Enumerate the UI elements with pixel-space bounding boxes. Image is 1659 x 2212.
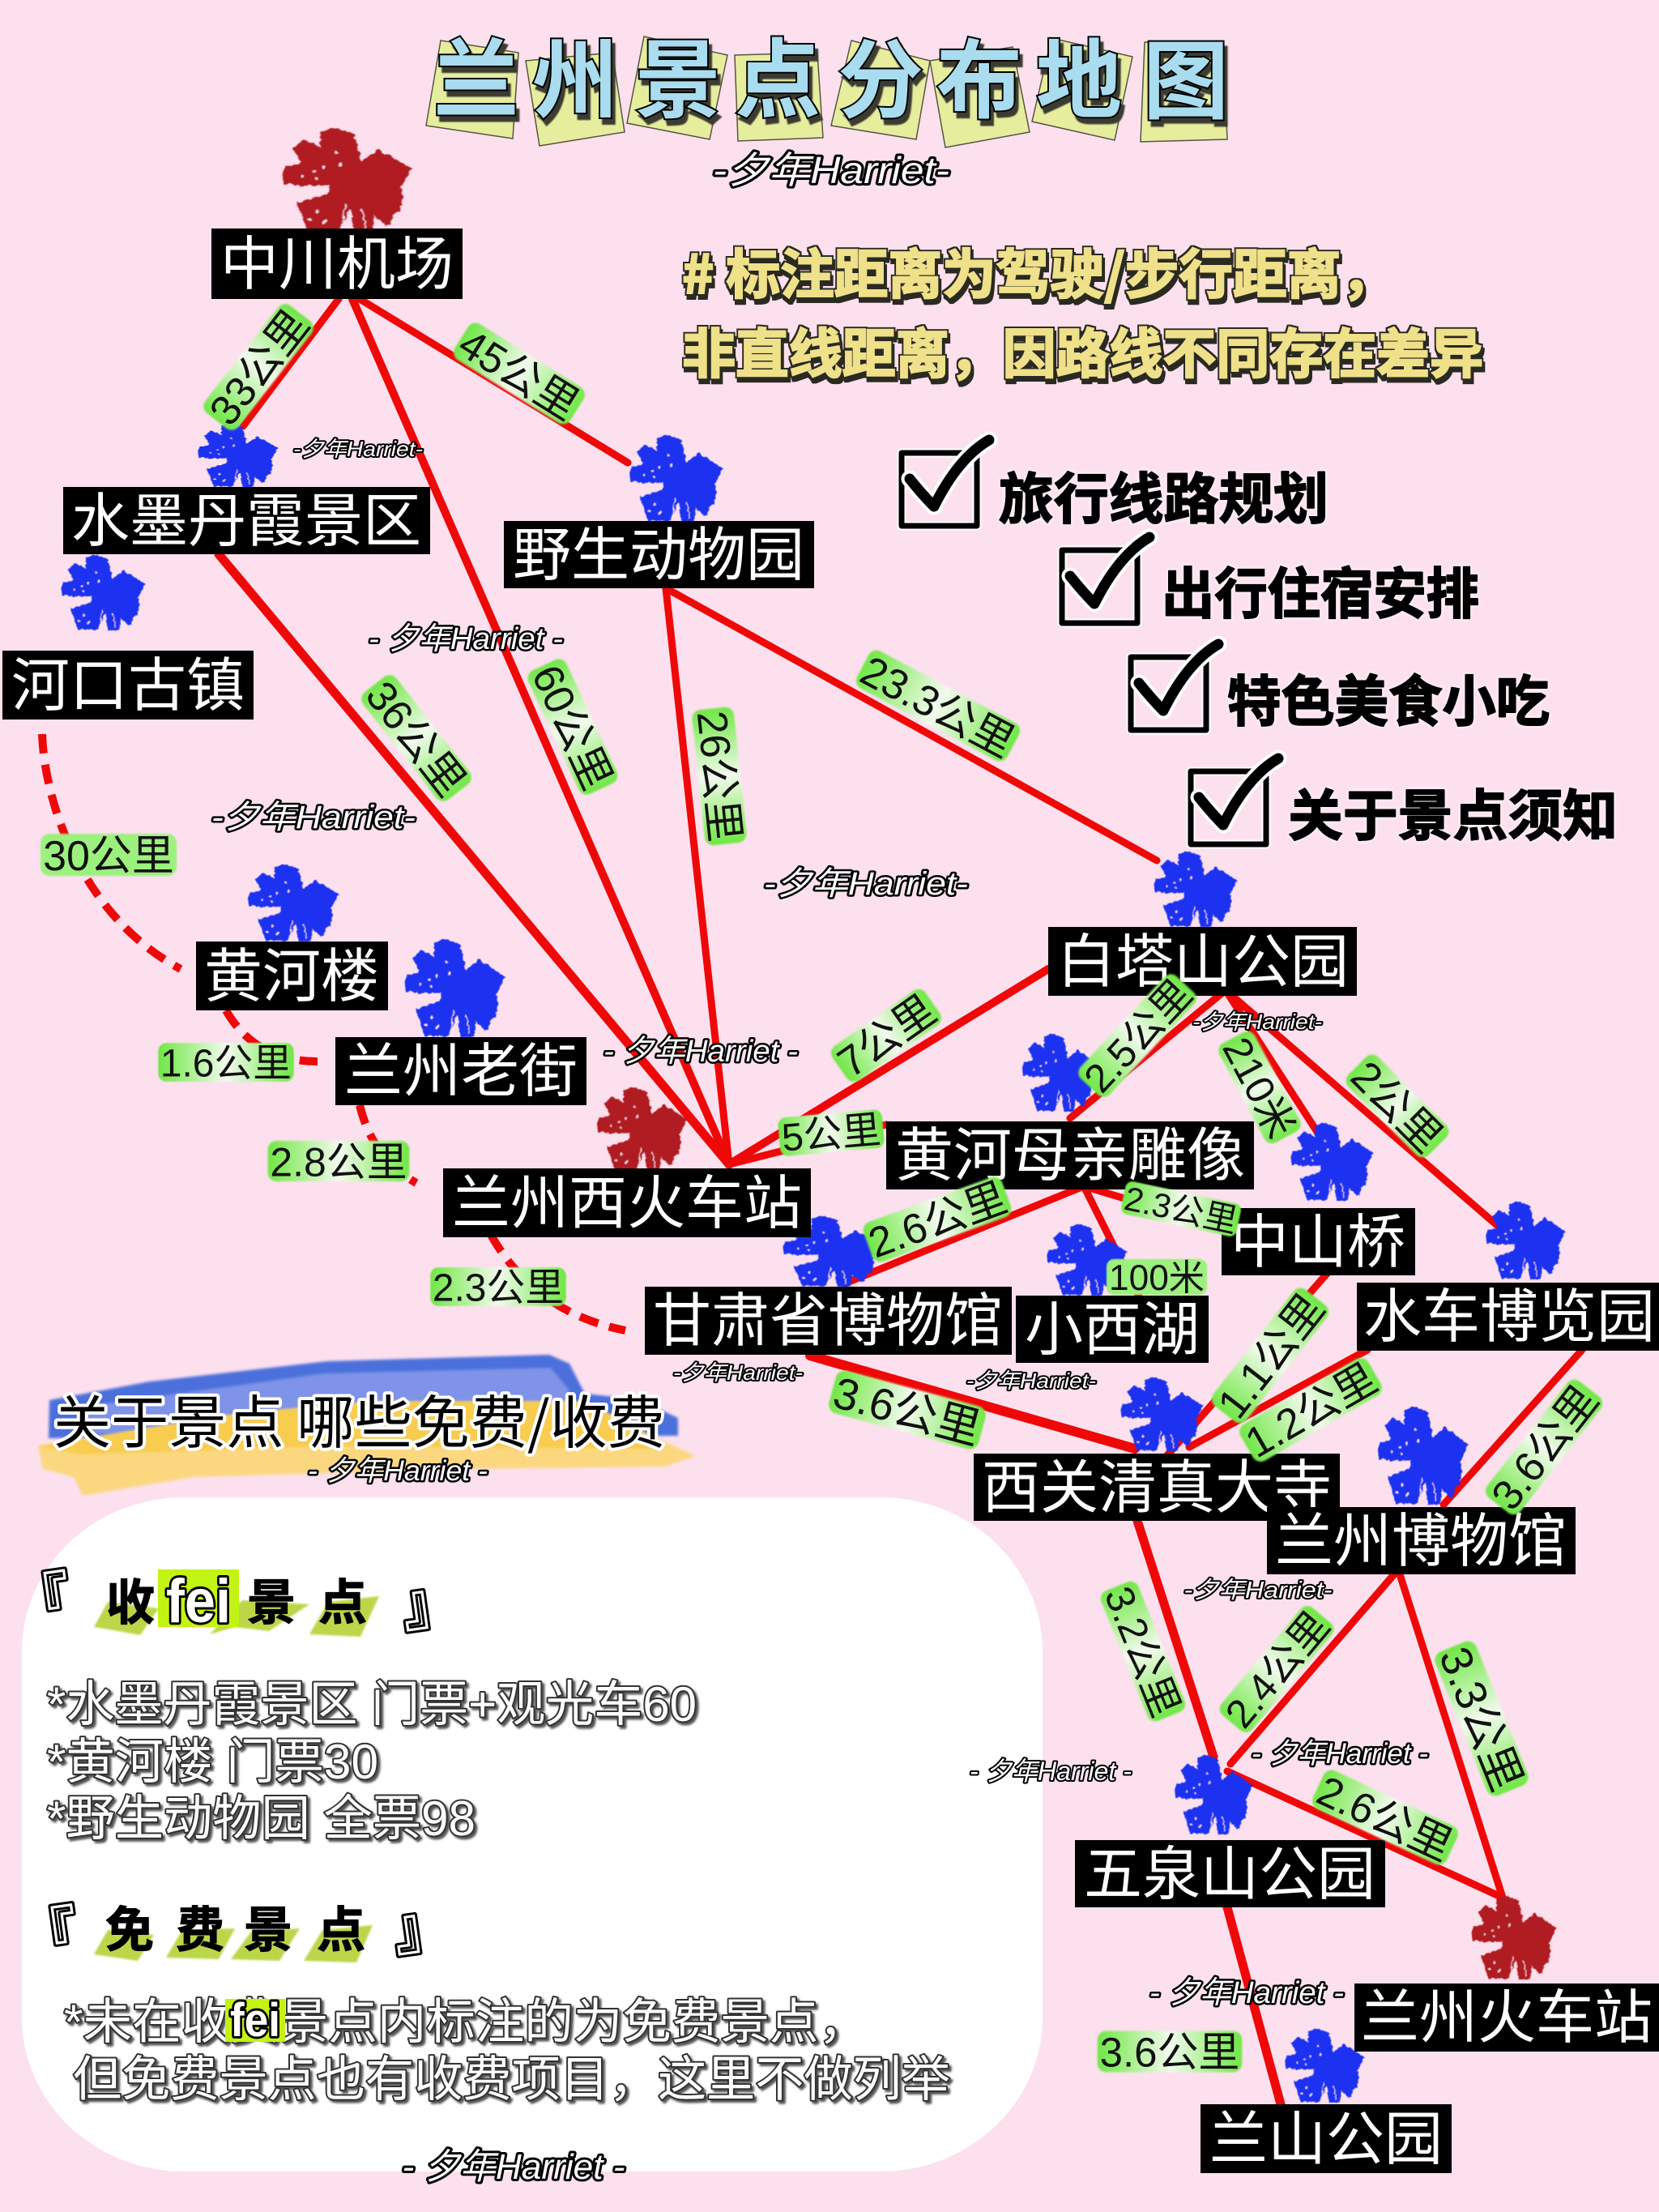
icon: blue flower 西关清真大寺 [1121, 1377, 1203, 1451]
heading: 免费景点: 『 [13, 1885, 83, 1977]
panel: white fee panel [22, 1497, 1043, 2171]
icon: red flower 兰州火车站 [1473, 1895, 1556, 1979]
route lines network [219, 299, 1582, 2104]
icon: blue flower 黄河母亲 [1023, 1033, 1097, 1112]
watermark: -夕年Harriet- [1184, 1578, 1332, 1603]
distance: 2.4公里: 2.4公里 [1217, 1603, 1338, 1736]
distance: 2.3公里 west: 2.3公里 [433, 1266, 564, 1309]
label: 西关清真大寺: 西关清真大寺 [982, 1440, 1332, 1525]
note: distance disclaimer: 非直线距离，因路线不同存在差异 [682, 311, 1483, 389]
label: 水墨丹霞景区: 水墨丹霞景区 [71, 473, 421, 558]
icon: blue flower 水墨丹霞 [198, 423, 278, 487]
text block: 免费说明 [64, 1994, 950, 2107]
title: 兰州景点分布地图: 州 [532, 11, 618, 136]
label: 黄河楼: 黄河楼 [204, 929, 379, 1014]
distance: 2.6公里: 2.6公里 [863, 1174, 1013, 1267]
icon: blue flower 白塔山 [1154, 851, 1237, 927]
icon: blue flower 水车博览园 [1486, 1201, 1565, 1279]
list: 收费项目: *水墨丹霞景区 门票+观光车60 [47, 1677, 697, 1732]
label: 小西湖: 小西湖 [1025, 1282, 1200, 1367]
heading: 免费景点: 』 [386, 1875, 456, 1967]
checklist item 3: 特色美食小吃 [1227, 657, 1550, 737]
distance: 36公里: 36公里 [356, 673, 474, 805]
distance: 2公里: 2公里 [1341, 1053, 1451, 1162]
heading: 收费景点: 点 [318, 1564, 367, 1634]
watermark: -夕年Harriet- [713, 149, 949, 191]
note: distance disclaimer [682, 232, 1483, 389]
label: 五泉山公园: 五泉山公园 [1084, 1826, 1375, 1911]
distance: 26公里: 26公里 [688, 709, 748, 844]
watermark: -夕年Harriet- [966, 1369, 1096, 1393]
label: 河口古镇: 河口古镇 [11, 638, 245, 723]
watermark: - 夕年Harriet - [369, 622, 563, 656]
title: 兰州景点分布地图: 点 [735, 11, 821, 135]
distance: 2.5公里: 2.5公里 [1076, 971, 1201, 1101]
distance: 3.6公里 lower: 3.6公里 [1100, 2030, 1239, 2076]
icon: blue flower 黄河楼 [249, 864, 339, 942]
checklist item 1 [902, 440, 1328, 535]
label: 中山桥: 中山桥 [1230, 1194, 1405, 1279]
checklist item 3 [1131, 644, 1550, 737]
watermark: - 夕年Harriet - [970, 1757, 1132, 1786]
label: 白塔山公园: 白塔山公园 [1057, 914, 1349, 999]
distance: 60公里: 60公里 [522, 658, 621, 796]
label: 兰州老街: 兰州老街 [344, 1023, 578, 1108]
heading: 收费景点: fei [166, 1567, 231, 1636]
distance: 1.1公里: 1.1公里 [1209, 1286, 1334, 1428]
icon: red flower airport [284, 127, 412, 233]
dashed route lines [42, 734, 625, 1330]
heading: 收费景点: 『 [6, 1551, 75, 1643]
text block: 免费说明: 但免费景点也有收费项目，这里不做列举 [73, 2052, 950, 2107]
watermark: - 夕年Harriet - [603, 1035, 798, 1069]
icon: blue flower 小西湖 [1047, 1223, 1127, 1296]
title: 兰州景点分布地图: 景 [635, 11, 721, 136]
label: 兰州西火车站: 兰州西火车站 [452, 1155, 802, 1241]
title: 兰州景点分布地图: 地 [1036, 11, 1122, 136]
distance: 7公里: 7公里 [830, 987, 945, 1087]
watermark: -夕年Harriet- [764, 866, 968, 902]
list: 收费项目: *黄河楼 门票30 [47, 1735, 378, 1789]
section heading: 关于景点 哪些免费/收费 [38, 1355, 696, 1496]
heading: 收费景点: 』 [395, 1551, 465, 1643]
label: 兰山公园: 兰山公园 [1209, 2091, 1443, 2176]
icon: blue flower 兰山公园 [1286, 2028, 1364, 2103]
distance: 33公里: 33公里 [201, 302, 318, 434]
distance: 30公里: 30公里 [43, 833, 174, 880]
icon: red flower 西站 [598, 1087, 687, 1171]
checklist item 2: 出行住宿安排 [1162, 549, 1479, 630]
watermark: - 夕年Harriet - [308, 1455, 488, 1487]
heading: 免费景点: 免 [105, 1891, 154, 1962]
label: 甘肃省博物馆: 甘肃省博物馆 [653, 1273, 1003, 1358]
text block: 免费说明: *未在收费景点内标注的为免费景点， [64, 1995, 868, 2049]
heading: 收费景点: 收 [106, 1564, 155, 1634]
heading: 收费景点 [6, 1551, 465, 1643]
watermark: -夕年Harriet- [293, 437, 423, 461]
checklist item 4 [1191, 758, 1618, 852]
distance: 3.2公里: 3.2公里 [1096, 1581, 1188, 1723]
watermark: -夕年Harriet- [1192, 1010, 1322, 1034]
label: 中川机场: 中川机场 [220, 216, 454, 301]
distance: 210米: 210米 [1213, 1031, 1303, 1146]
heading: 免费景点: 点 [317, 1891, 365, 1962]
icon: blue flower 五泉山 [1175, 1754, 1252, 1834]
watermark: - 夕年Harriet - [402, 2147, 625, 2187]
list: 收费项目 [47, 1677, 697, 1846]
title: 兰州景点分布地图: 图 [1143, 12, 1229, 137]
checklist item 1: 旅行线路规划 [999, 455, 1328, 535]
label: 兰州火车站: 兰州火车站 [1361, 1970, 1653, 2055]
note: distance disclaimer: # 标注距离为驾驶/步行距离， [682, 232, 1395, 310]
title: 兰州景点分布地图: 布 [936, 11, 1022, 136]
title: 兰州景点分布地图: 分 [838, 11, 923, 136]
distance: 2.6公里 lower: 2.6公里 [1310, 1767, 1459, 1870]
list: 收费项目: *野生动物园 全票98 [47, 1791, 476, 1846]
heading: 收费景点: 景 [247, 1564, 296, 1634]
heading: 免费景点: 景 [244, 1891, 292, 1962]
icon: blue flower 兰州博物馆 [1379, 1406, 1468, 1505]
label: 兰州博物馆: 兰州博物馆 [1275, 1493, 1567, 1578]
watermark: -夕年Harriet- [211, 800, 416, 835]
distance: 23.3公里: 23.3公里 [853, 647, 1021, 767]
distance: 3.6公里 right: 3.6公里 [1482, 1377, 1608, 1519]
icon: blue flower 甘肃省博物馆 [784, 1215, 881, 1287]
label: 水车博览园: 水车博览园 [1363, 1269, 1655, 1354]
distance: 100米: 100米 [1109, 1258, 1205, 1298]
watermark: -夕年Harriet- [673, 1360, 803, 1385]
heading: 免费景点 [13, 1875, 456, 1977]
distance: 2.3公里: 2.3公里 [1121, 1179, 1241, 1240]
section heading: 关于景点 哪些免费/收费: 关于景点 哪些免费/收费 [53, 1377, 665, 1460]
distance: 1.2公里: 1.2公里 [1238, 1356, 1385, 1467]
label: 黄河母亲雕像: 黄河母亲雕像 [895, 1108, 1245, 1193]
icon: blue flower 中山桥 [1291, 1122, 1373, 1201]
distance: 2.8公里: 2.8公里 [270, 1139, 407, 1185]
title: 兰州景点分布地图 [426, 11, 1229, 147]
checklist item 4: 关于景点须知 [1288, 771, 1618, 852]
checklist item 2 [1062, 537, 1479, 630]
distance: 5公里: 5公里 [780, 1108, 882, 1160]
watermark: - 夕年Harriet - [1149, 1976, 1344, 2010]
icon: blue flower 兰州老街 [406, 938, 505, 1037]
distance: 45公里: 45公里 [450, 320, 586, 429]
watermark: - 夕年Harriet - [1252, 1738, 1428, 1770]
text block: 免费说明: fei [230, 1994, 280, 2047]
distance: 1.6公里: 1.6公里 [160, 1042, 292, 1085]
heading: 免费景点: 费 [176, 1891, 224, 1962]
distance: 3.6公里 middle: 3.6公里 [828, 1368, 986, 1454]
icon: blue flower 野生动物园 [630, 434, 723, 522]
title: 兰州景点分布地图: 兰 [433, 11, 519, 135]
icon: blue flower 河口古镇 [62, 554, 145, 630]
label: 野生动物园: 野生动物园 [513, 507, 804, 592]
distance: 3.3公里: 3.3公里 [1430, 1640, 1532, 1798]
